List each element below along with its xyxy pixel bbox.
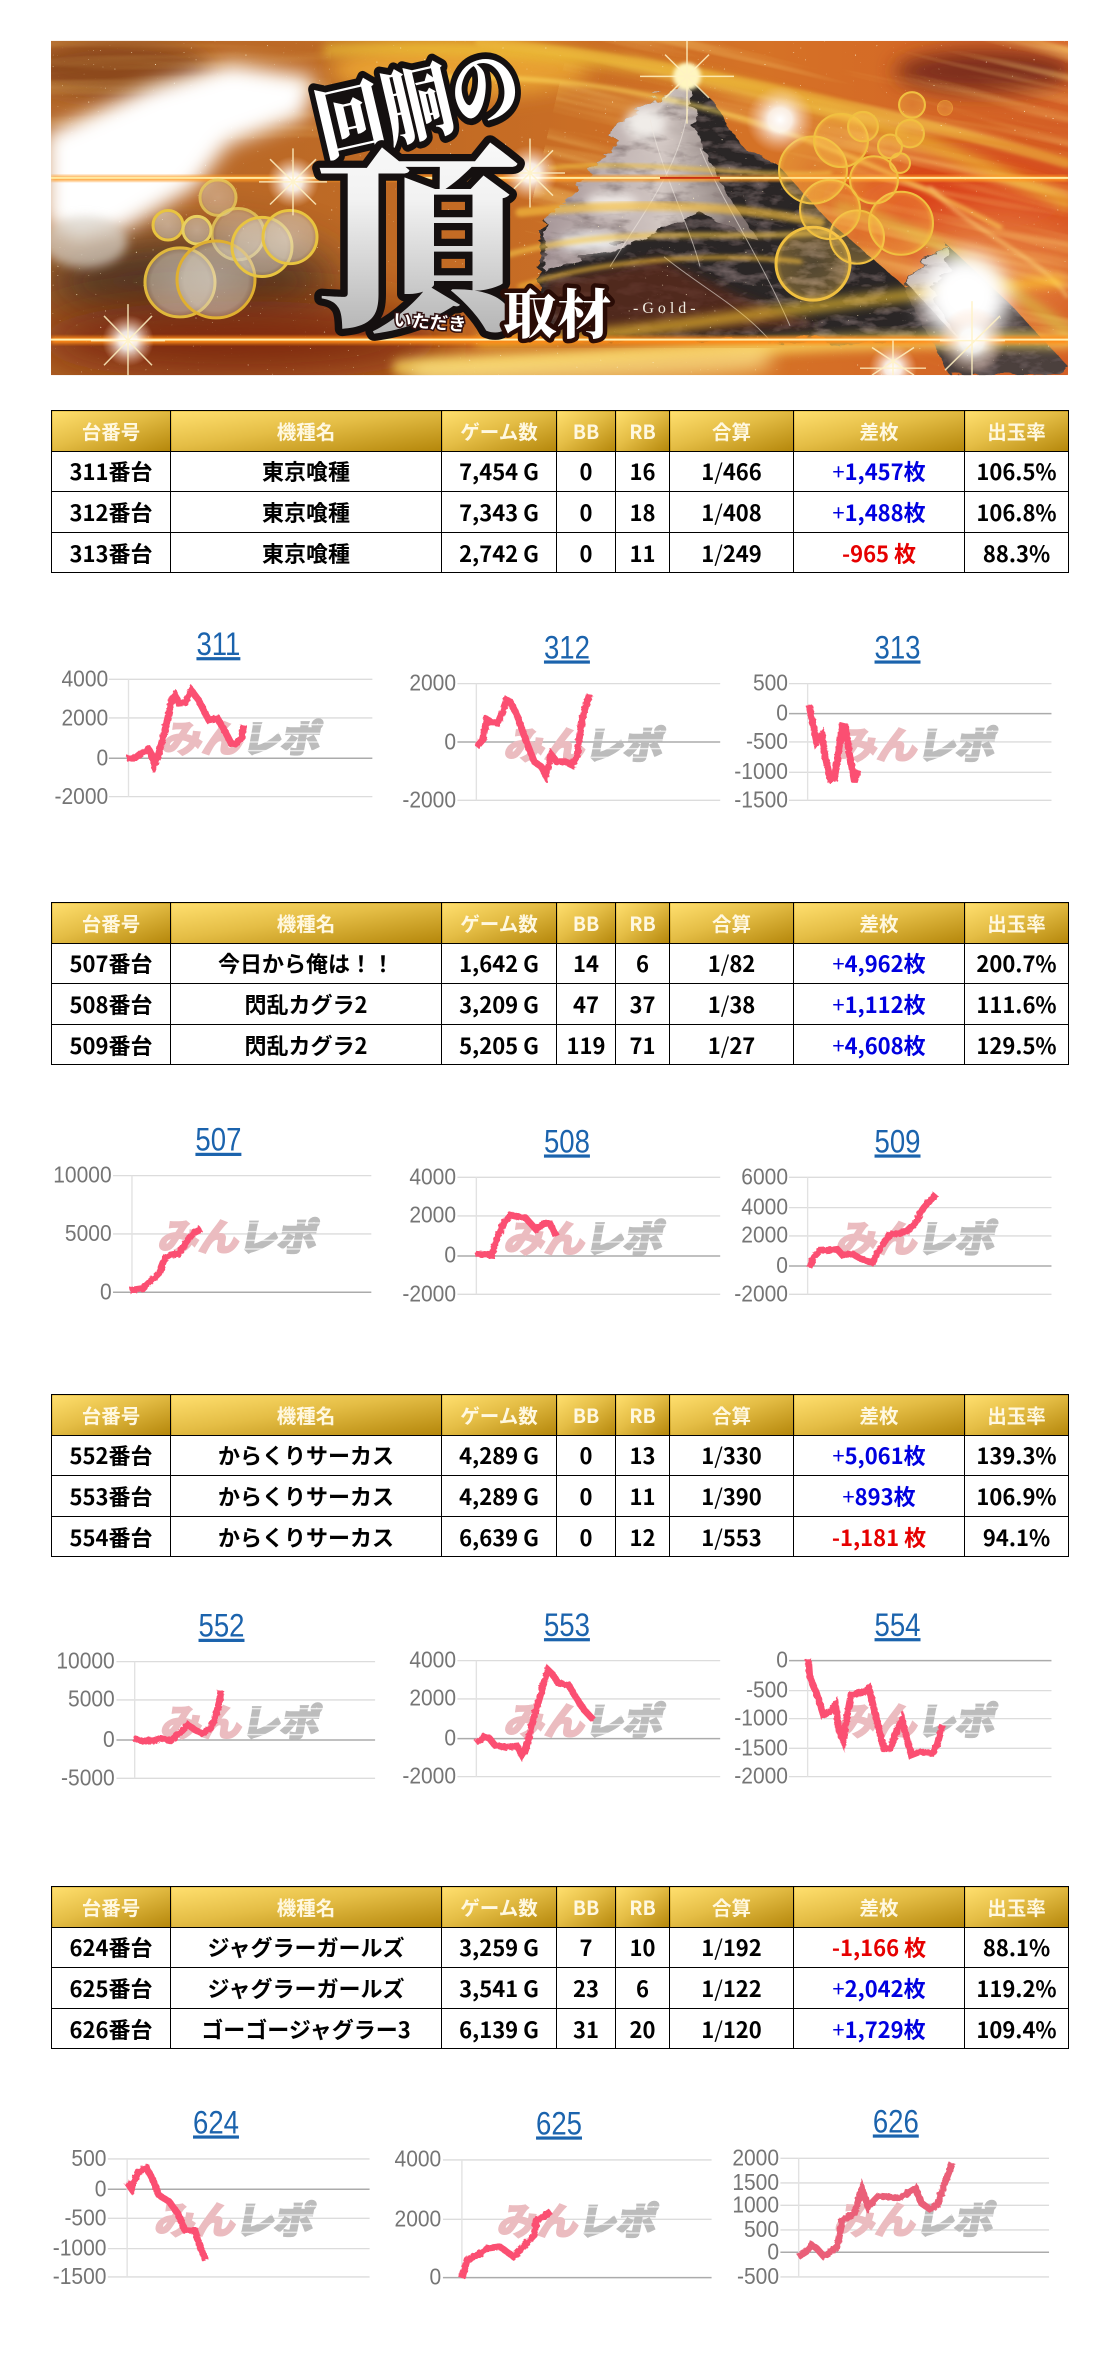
table: 311-313: 311番台 <box>70 455 152 487</box>
y axis labels: 0 <box>776 1647 788 1673</box>
table: 624-626: 1/120 <box>701 2013 762 2045</box>
title: いただき: いただき <box>393 306 467 337</box>
y axis labels: 4000 <box>395 2146 441 2172</box>
icon: mountains <box>540 76 1067 375</box>
table: 311-313: 1/408 <box>701 496 762 528</box>
table: 507-509: BB <box>573 908 599 937</box>
table: 311-313: 出玉率 <box>987 416 1046 445</box>
table: 311-313: 東京喰種 <box>262 496 350 528</box>
y axis labels: 6000 <box>741 1164 788 1190</box>
table: 311-313: BB <box>573 416 599 445</box>
watermark: レポ <box>914 1210 1002 1264</box>
table: 552-554: +5,061枚 <box>832 1439 926 1471</box>
y axis labels: 500 <box>71 2145 106 2171</box>
watermark: レポ <box>582 1210 669 1264</box>
table: 507-509: 閃乱カグラ2 <box>244 988 367 1020</box>
chart 508 <box>402 1124 720 1306</box>
line series <box>809 1663 942 1755</box>
table: 624-626: 1/192 <box>701 1931 762 1963</box>
y axis labels: 0 <box>430 2264 441 2290</box>
table: 552-554: BB <box>573 1400 599 1429</box>
title 626: 626 <box>873 2104 919 2140</box>
table: 624-626: 625番台 <box>70 1972 152 2004</box>
chart 554 <box>734 1608 1051 1789</box>
table: 311-313: 東京喰種 <box>262 455 350 487</box>
watermark: みん <box>155 1208 246 1262</box>
y axis labels: 0 <box>767 2239 779 2264</box>
table: 507-509: 129.5% <box>976 1029 1057 1061</box>
table: 311-313: 11 <box>630 537 655 569</box>
y axis labels <box>734 1647 788 1789</box>
watermark <box>832 2192 1000 2245</box>
y axis labels: -2000 <box>734 1763 788 1789</box>
lens flare lines <box>51 176 1068 344</box>
y axis labels <box>53 2145 106 2289</box>
line series <box>463 2213 548 2275</box>
y axis labels: 4000 <box>61 666 108 692</box>
table: 311-313: 2,742 G <box>459 537 539 569</box>
table: 311-313: 差枚 <box>859 416 898 445</box>
table: 507-509: 14 <box>573 947 599 979</box>
y axis labels: 2000 <box>741 1222 788 1248</box>
title 311: 311 <box>196 627 240 662</box>
y axis labels: 4000 <box>409 1164 456 1190</box>
table: 311-313: 16 <box>630 455 655 487</box>
watermark <box>833 1210 1002 1264</box>
y axis labels <box>395 2146 441 2290</box>
table: 624-626: 台番号 <box>82 1892 140 1921</box>
table: 311-313: 106.8% <box>976 496 1057 528</box>
table: 552-554 <box>51 1394 1069 1557</box>
y axis labels: 1500 <box>732 2169 779 2195</box>
table: 552-554: 553番台 <box>70 1480 152 1512</box>
watermark: みん <box>833 1210 924 1264</box>
watermark: レポ <box>582 717 669 770</box>
table: 507-509: 509番台 <box>70 1029 152 1061</box>
icon: bokeh circles left <box>145 180 317 318</box>
y axis labels: 5000 <box>68 1686 115 1712</box>
y axis labels <box>402 670 456 812</box>
table: 624-626: RB <box>629 1892 656 1921</box>
table: 552-554: 1/553 <box>701 1521 762 1553</box>
y axis labels <box>732 2145 779 2289</box>
table: 311-313: 312番台 <box>70 496 152 528</box>
table: 552-554: -1,181 枚 <box>832 1521 926 1553</box>
title: 回胴の: 回胴の <box>302 19 530 179</box>
y axis labels: 2000 <box>395 2206 441 2231</box>
table: 624-626: 差枚 <box>859 1892 898 1921</box>
table: 311-313: 7,454 G <box>459 455 539 487</box>
watermark: レポ <box>913 2192 1000 2245</box>
line series <box>479 1670 591 1755</box>
table: 552-554: 合算 <box>712 1400 751 1429</box>
watermark <box>152 2192 320 2245</box>
table: 552-554: 4,289 G <box>459 1480 539 1512</box>
watermark: レポ <box>582 1693 669 1746</box>
table: 624-626: +1,729枚 <box>832 2013 926 2045</box>
line series <box>810 1197 934 1264</box>
y axis labels: -2000 <box>734 1281 788 1306</box>
table: 311-313: +1,488枚 <box>832 496 926 528</box>
table: 552-554: 13 <box>630 1439 655 1471</box>
table: 552-554: 4,289 G <box>459 1439 539 1471</box>
table: 552-554: RB <box>629 1400 656 1429</box>
y axis labels: 500 <box>753 670 788 696</box>
watermark: みん <box>501 1693 592 1746</box>
y axis labels <box>402 1647 456 1789</box>
y axis labels: 0 <box>444 729 456 754</box>
title 624: 624 <box>193 2105 239 2141</box>
title 625: 625 <box>536 2106 582 2142</box>
table: 507-509: RB <box>629 908 656 937</box>
table: 311-313: 東京喰種 <box>262 537 350 569</box>
table: 624-626: BB <box>573 1892 599 1921</box>
y axis labels: 2000 <box>732 2145 779 2171</box>
white glow blob <box>45 64 315 241</box>
y axis labels: 2000 <box>61 705 108 730</box>
watermark: みん <box>152 2192 242 2245</box>
table: 624-626: ジャグラーガールズ <box>208 1972 404 2004</box>
light streaks <box>330 42 1067 375</box>
watermark: レポ <box>239 710 327 764</box>
table: 624-626: 624番台 <box>70 1931 152 1963</box>
table: 552-554: 出玉率 <box>987 1400 1046 1429</box>
watermark: みん <box>501 717 592 770</box>
table: 311-313: -965 枚 <box>842 537 916 569</box>
y axis labels: 4000 <box>741 1194 788 1219</box>
table: 552-554: 機種名 <box>277 1400 335 1429</box>
y axis labels: 5000 <box>65 1220 112 1246</box>
table: 311-313 <box>51 410 1069 573</box>
watermark: レポ <box>239 1694 326 1748</box>
table: 507-509: 出玉率 <box>987 908 1046 937</box>
table: 552-554: 差枚 <box>859 1400 898 1429</box>
y axis labels: 0 <box>444 1242 456 1268</box>
table: 624-626: 合算 <box>712 1892 751 1921</box>
y axis labels: -500 <box>737 2263 779 2289</box>
table: 552-554: 台番号 <box>82 1400 140 1429</box>
y axis labels: 500 <box>744 2216 779 2242</box>
table: 624-626: 31 <box>573 2013 599 2045</box>
subtitle: -Gold-: -Gold- <box>633 300 700 317</box>
table: 507-509: 合算 <box>712 908 751 937</box>
table: 507-509: 71 <box>630 1029 655 1061</box>
watermark <box>494 2192 662 2246</box>
title 554: 554 <box>875 1608 920 1643</box>
table: 624-626: 20 <box>630 2013 655 2045</box>
title 509: 509 <box>875 1124 920 1160</box>
table: 624-626: ゲーム数 <box>460 1892 538 1921</box>
y axis labels: -2000 <box>54 783 108 809</box>
table: 624-626: 6,139 G <box>459 2013 539 2045</box>
y axis labels: 2000 <box>409 1202 456 1228</box>
watermark: みん <box>494 2192 585 2246</box>
table: 552-554: 6,639 G <box>459 1521 539 1553</box>
table: 624-626: 機種名 <box>277 1892 335 1921</box>
y axis labels: -1000 <box>734 1705 788 1731</box>
line series <box>130 691 243 765</box>
title 553: 553 <box>544 1608 590 1643</box>
watermark <box>833 717 1002 770</box>
chart 313 <box>734 630 1051 812</box>
table: 507-509: 5,205 G <box>459 1029 539 1061</box>
y axis labels <box>54 666 108 809</box>
y axis labels: 0 <box>103 1726 115 1752</box>
watermark <box>155 1208 323 1262</box>
table: 507-509: 119 <box>567 1029 605 1061</box>
chart 509 <box>734 1124 1051 1306</box>
y axis labels: 2000 <box>409 1685 456 1711</box>
watermark: レポ <box>575 2192 662 2246</box>
table: 552-554: 12 <box>630 1521 655 1553</box>
table: 552-554: 1/390 <box>701 1480 762 1512</box>
table: 624-626: 119.2% <box>976 1972 1057 2004</box>
table: 552-554: 0 <box>580 1480 592 1512</box>
watermark: みん <box>501 1210 592 1264</box>
y axis labels: -500 <box>64 2205 106 2230</box>
table: 552-554: +893枚 <box>842 1480 916 1512</box>
table: 552-554: 552番台 <box>70 1439 152 1471</box>
watermark: レポ <box>232 2192 320 2245</box>
table: 311-313: 0 <box>580 496 592 528</box>
y axis labels: 0 <box>95 2176 106 2201</box>
y axis labels: -1000 <box>53 2235 106 2261</box>
table: 311-313: 313番台 <box>70 537 152 569</box>
table: 311-313: 7,343 G <box>459 496 539 528</box>
chart 311 <box>54 627 372 809</box>
table: 624-626: 3,259 G <box>459 1931 539 1963</box>
y axis labels: -1000 <box>734 758 788 784</box>
y axis labels <box>734 670 788 812</box>
y axis labels: 0 <box>776 700 788 726</box>
table: 311-313: 1/249 <box>701 537 762 569</box>
table: 552-554: 554番台 <box>70 1521 152 1553</box>
table: 552-554: からくりサーカス <box>218 1480 394 1512</box>
watermark <box>501 1210 669 1264</box>
title 508: 508 <box>544 1124 590 1160</box>
table: 507-509: 機種名 <box>277 908 335 937</box>
table: 624-626: 7 <box>580 1931 592 1963</box>
line series <box>133 1231 198 1290</box>
y axis labels: -2000 <box>402 1763 456 1789</box>
table: 507-509: 507番台 <box>70 947 152 979</box>
chart 625 <box>395 2106 712 2290</box>
table: 507-509: 200.7% <box>976 947 1057 979</box>
table: 311-313: 1/466 <box>701 455 762 487</box>
chart 507 <box>53 1123 371 1304</box>
table: 311-313: 台番号 <box>82 416 140 445</box>
y axis labels: 0 <box>776 1252 788 1278</box>
table: 507-509: +4,608枚 <box>832 1029 926 1061</box>
y axis labels: 10000 <box>56 1648 115 1674</box>
table: 311-313: 18 <box>630 496 655 528</box>
y axis labels <box>53 1162 112 1304</box>
table: 507-509: 6 <box>636 947 649 979</box>
y axis labels: -1500 <box>734 787 788 812</box>
watermark <box>158 710 327 764</box>
watermark: みん <box>833 1693 924 1746</box>
watermark: レポ <box>914 717 1002 770</box>
icon: sparkle dust <box>51 41 1068 375</box>
y axis labels: 4000 <box>409 1647 456 1673</box>
table: 624-626: 109.4% <box>976 2013 1057 2045</box>
y axis labels: 0 <box>100 1279 112 1304</box>
y axis labels: -5000 <box>61 1765 115 1790</box>
watermark <box>158 1694 326 1748</box>
title: 取材: 取材 <box>503 273 611 350</box>
y axis labels: 2000 <box>409 670 456 696</box>
table: 311-313: 106.5% <box>976 455 1057 487</box>
table: 507-509: +4,962枚 <box>832 947 926 979</box>
y axis labels: -1500 <box>734 1735 788 1760</box>
title 507: 507 <box>195 1123 241 1158</box>
watermark: みん <box>158 1694 248 1748</box>
table: 552-554: からくりサーカス <box>218 1439 394 1471</box>
table: 552-554: 0 <box>580 1439 592 1471</box>
y axis labels: 0 <box>97 745 108 771</box>
title 552: 552 <box>199 1609 244 1644</box>
table: 624-626: 出玉率 <box>987 1892 1046 1921</box>
table: 552-554: 139.3% <box>976 1439 1057 1471</box>
y axis labels: -500 <box>746 728 788 754</box>
watermark: みん <box>833 717 924 770</box>
chart 626 <box>732 2104 1049 2289</box>
table: 507-509: 111.6% <box>976 988 1057 1020</box>
table: 624-626: 3,541 G <box>459 1972 539 2004</box>
y axis labels <box>402 1164 456 1306</box>
table: 624-626: +2,042枚 <box>832 1972 926 2004</box>
watermark <box>501 1693 669 1746</box>
table: 311-313: RB <box>629 416 656 445</box>
icon: bokeh circles right <box>776 92 953 300</box>
table: 507-509: 47 <box>573 988 599 1020</box>
table: 624-626: 1/122 <box>701 1972 762 2004</box>
watermark: みん <box>158 710 249 764</box>
table: 311-313: 0 <box>580 537 592 569</box>
table: 311-313: 88.3% <box>983 537 1050 569</box>
chart 553 <box>402 1608 720 1789</box>
table: 624-626: 10 <box>630 1931 655 1963</box>
table: 507-509: 閃乱カグラ2 <box>244 1029 367 1061</box>
line series <box>801 2166 951 2256</box>
y axis labels: -2000 <box>402 787 456 812</box>
table: 624-626 <box>51 1886 1069 2049</box>
table: 624-626: ジャグラーガールズ <box>208 1931 404 1963</box>
table: 507-509: 37 <box>630 988 655 1020</box>
table: 507-509: 1,642 G <box>459 947 539 979</box>
table: 507-509: 1/27 <box>708 1029 755 1061</box>
table: 507-509: 1/82 <box>708 947 755 979</box>
watermark <box>501 717 669 770</box>
title: 頂: 頂 <box>314 84 529 372</box>
table: 311-313: 0 <box>580 455 592 487</box>
table: 507-509: 今日から俺は！！ <box>218 947 394 979</box>
line series <box>810 708 857 782</box>
icon: sparkle stars <box>91 41 1010 392</box>
table: 624-626: 88.1% <box>983 1931 1050 1963</box>
y axis labels: 0 <box>444 1725 456 1751</box>
table: 552-554: 106.9% <box>976 1480 1057 1512</box>
table: 507-509: ゲーム数 <box>460 908 538 937</box>
title 312: 312 <box>544 630 590 666</box>
table: 311-313: +1,457枚 <box>832 455 926 487</box>
table: 624-626: 6 <box>636 1972 649 2004</box>
watermark: みん <box>832 2192 922 2245</box>
table: 552-554: 0 <box>580 1521 592 1553</box>
chart 312 <box>402 630 720 812</box>
chart 624 <box>53 2105 370 2289</box>
table: 552-554: ゲーム数 <box>460 1400 538 1429</box>
y axis labels: -1500 <box>53 2263 106 2289</box>
table: 507-509: 3,209 G <box>459 988 539 1020</box>
table: 507-509: +1,112枚 <box>832 988 926 1020</box>
chart 552 <box>56 1609 375 1790</box>
table: 624-626: 626番台 <box>70 2013 152 2045</box>
y axis labels <box>56 1648 115 1790</box>
table: 552-554: 11 <box>630 1480 655 1512</box>
table: 311-313: ゲーム数 <box>460 416 538 445</box>
table: 624-626: -1,166 枚 <box>832 1931 926 1963</box>
y axis labels: -500 <box>746 1677 788 1703</box>
table: 552-554: 94.1% <box>983 1521 1050 1553</box>
y axis labels: 10000 <box>53 1162 112 1188</box>
line series <box>137 1694 220 1741</box>
watermark <box>833 1693 1002 1746</box>
table: 552-554: からくりサーカス <box>218 1521 394 1553</box>
watermark: レポ <box>236 1208 323 1262</box>
line series <box>479 697 589 775</box>
banner: 回胴の頂取材 -Gold- <box>51 40 1068 376</box>
y axis labels: 1000 <box>732 2192 779 2217</box>
table: 507-509: 台番号 <box>82 908 140 937</box>
y axis labels <box>734 1164 788 1306</box>
table: 311-313: 合算 <box>712 416 751 445</box>
watermark: レポ <box>914 1693 1002 1746</box>
title 313: 313 <box>875 630 920 666</box>
table: 552-554: 1/330 <box>701 1439 762 1471</box>
line series <box>479 1215 555 1255</box>
table: 507-509: 508番台 <box>70 988 152 1020</box>
table: 507-509: 差枚 <box>859 908 898 937</box>
table: 507-509 <box>51 902 1069 1065</box>
table: 507-509: 1/38 <box>708 988 755 1020</box>
table: 624-626: ゴーゴージャグラー3 <box>201 2013 411 2045</box>
y axis labels: -2000 <box>402 1281 456 1306</box>
table: 311-313: 機種名 <box>277 416 335 445</box>
line series <box>129 2168 204 2257</box>
table: 624-626: 23 <box>573 1972 599 2004</box>
